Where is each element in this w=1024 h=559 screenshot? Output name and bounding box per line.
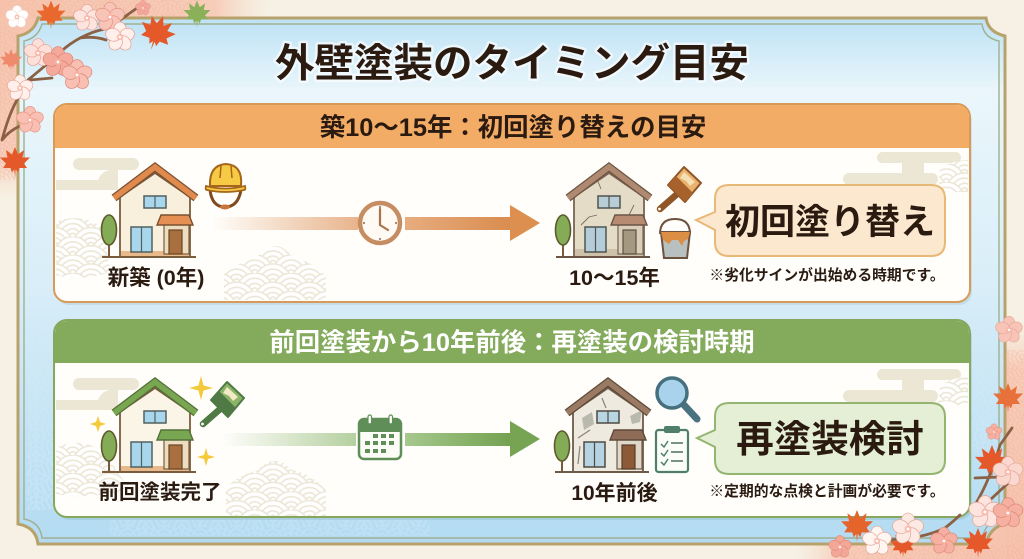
- icon: new house: [102, 167, 196, 257]
- panel header: first repaint: [55, 105, 969, 148]
- title: 外壁塗装のタイミング目安: [275, 42, 749, 86]
- icon: calendar: [359, 415, 401, 459]
- icon: green paint brush: [201, 382, 244, 425]
- icon: paint can: [660, 219, 690, 258]
- panel header: first repaint: 築10〜15年：初回塗り替えの目安: [320, 114, 706, 142]
- arrow: green timeline: [222, 415, 540, 459]
- icon: paint brush: [658, 167, 701, 210]
- callout: first repaint: [696, 185, 945, 256]
- background clouds and waves: [56, 369, 968, 516]
- aged house label: 10〜15年: [569, 266, 660, 290]
- arrow: orange timeline: [212, 203, 540, 243]
- icon: checklist: [656, 426, 688, 472]
- callout: repaint review: 再塗装検討: [736, 418, 924, 460]
- note: first repaint: ※劣化サインが出始める時期です。: [709, 266, 945, 284]
- decoration: top-left blossoms and maple: [0, 0, 210, 177]
- background clouds and waves: [56, 152, 968, 300]
- icon: hard hat: [206, 164, 245, 210]
- icon: clock: [360, 203, 400, 243]
- icon: sparkles: [90, 376, 215, 466]
- panel: first repaint: [54, 104, 972, 305]
- icon: freshly painted house: [102, 382, 196, 472]
- panel: repaint review: [54, 320, 972, 520]
- previous painting label: 前回塗装完了: [98, 481, 222, 504]
- deteriorated house label: 10年前後: [571, 482, 658, 505]
- new house label: 新築 (0年): [108, 266, 204, 290]
- panel header: repaint review: 前回塗装から10年前後：再塗装の検討時期: [269, 329, 755, 357]
- icon: magnifying glass: [657, 378, 697, 419]
- callout: repaint review: [697, 403, 945, 474]
- icon: deteriorated house: [554, 382, 649, 472]
- decoration: bottom-right blossoms and maple: [827, 316, 1024, 559]
- note: repaint review: ※定期的な点検と計画が必要です。: [709, 482, 945, 500]
- panel header: repaint review: [55, 321, 969, 363]
- callout: first repaint: 初回塗り替え: [725, 203, 935, 242]
- icon: aged house: [556, 167, 650, 257]
